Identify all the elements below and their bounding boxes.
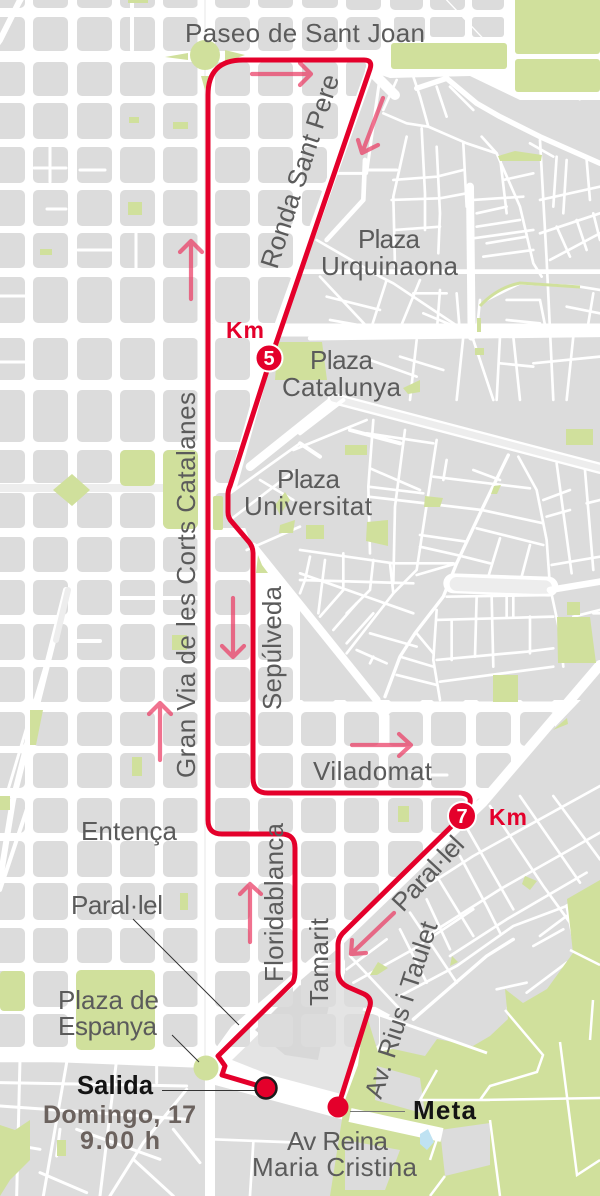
street labels: Sepúlveda xyxy=(257,585,287,710)
leader lines xyxy=(133,919,405,1112)
finish marker xyxy=(328,1096,348,1118)
km 7 marker: 7 xyxy=(456,806,468,828)
street labels: Paral·lel xyxy=(71,890,163,920)
street labels: Gran Via de les Corts Catalanes xyxy=(171,392,201,778)
street labels: Plaza de xyxy=(58,985,159,1015)
Raval streets xyxy=(230,398,600,700)
street labels: Urquinaona xyxy=(321,251,459,281)
street labels: Plaza xyxy=(277,464,341,494)
street labels: Floridablanca xyxy=(259,822,289,982)
start date and time xyxy=(43,1101,196,1155)
street labels: Viladomat xyxy=(313,756,433,786)
street labels: Espanya xyxy=(58,1011,158,1041)
start date and time: 9.00 h xyxy=(80,1127,160,1155)
street labels: Catalunya xyxy=(282,372,402,402)
street labels: Ronda Sant Pere xyxy=(254,70,345,272)
race route line xyxy=(208,60,470,1107)
start date and time: Domingo, 17 xyxy=(43,1101,196,1129)
icon: fountain xyxy=(420,1129,434,1150)
street labels: Paral·lel xyxy=(385,829,470,917)
km 7 label: Km xyxy=(489,804,527,830)
street labels: Maria Cristina xyxy=(252,1152,418,1182)
km 5 marker xyxy=(256,344,282,372)
km 7 marker xyxy=(448,802,476,830)
light strips on avenues xyxy=(0,323,213,492)
buildings and paths inside the park xyxy=(345,950,600,1196)
lower left streets xyxy=(0,1059,300,1196)
street labels: Entença xyxy=(81,816,178,846)
street labels: Av Reina xyxy=(287,1126,389,1156)
km 5 label: Km xyxy=(226,317,264,343)
start marker xyxy=(256,1078,276,1098)
street labels: Plaza xyxy=(358,224,421,254)
street labels: Paseo de Sant Joan xyxy=(185,18,425,48)
street labels: Av. Rius i Taulet xyxy=(358,917,444,1102)
km 5 marker: 5 xyxy=(263,348,275,370)
old town streets xyxy=(300,0,600,400)
direction arrows xyxy=(149,63,411,954)
Poble Sec streets xyxy=(347,786,600,1019)
start label: Salida xyxy=(77,1072,154,1100)
street labels: Plaza xyxy=(310,345,374,375)
street labels xyxy=(58,18,470,1182)
street labels: Universitat xyxy=(244,491,373,521)
street labels: Tamarit xyxy=(304,917,334,1006)
finish label: Meta xyxy=(413,1095,477,1125)
